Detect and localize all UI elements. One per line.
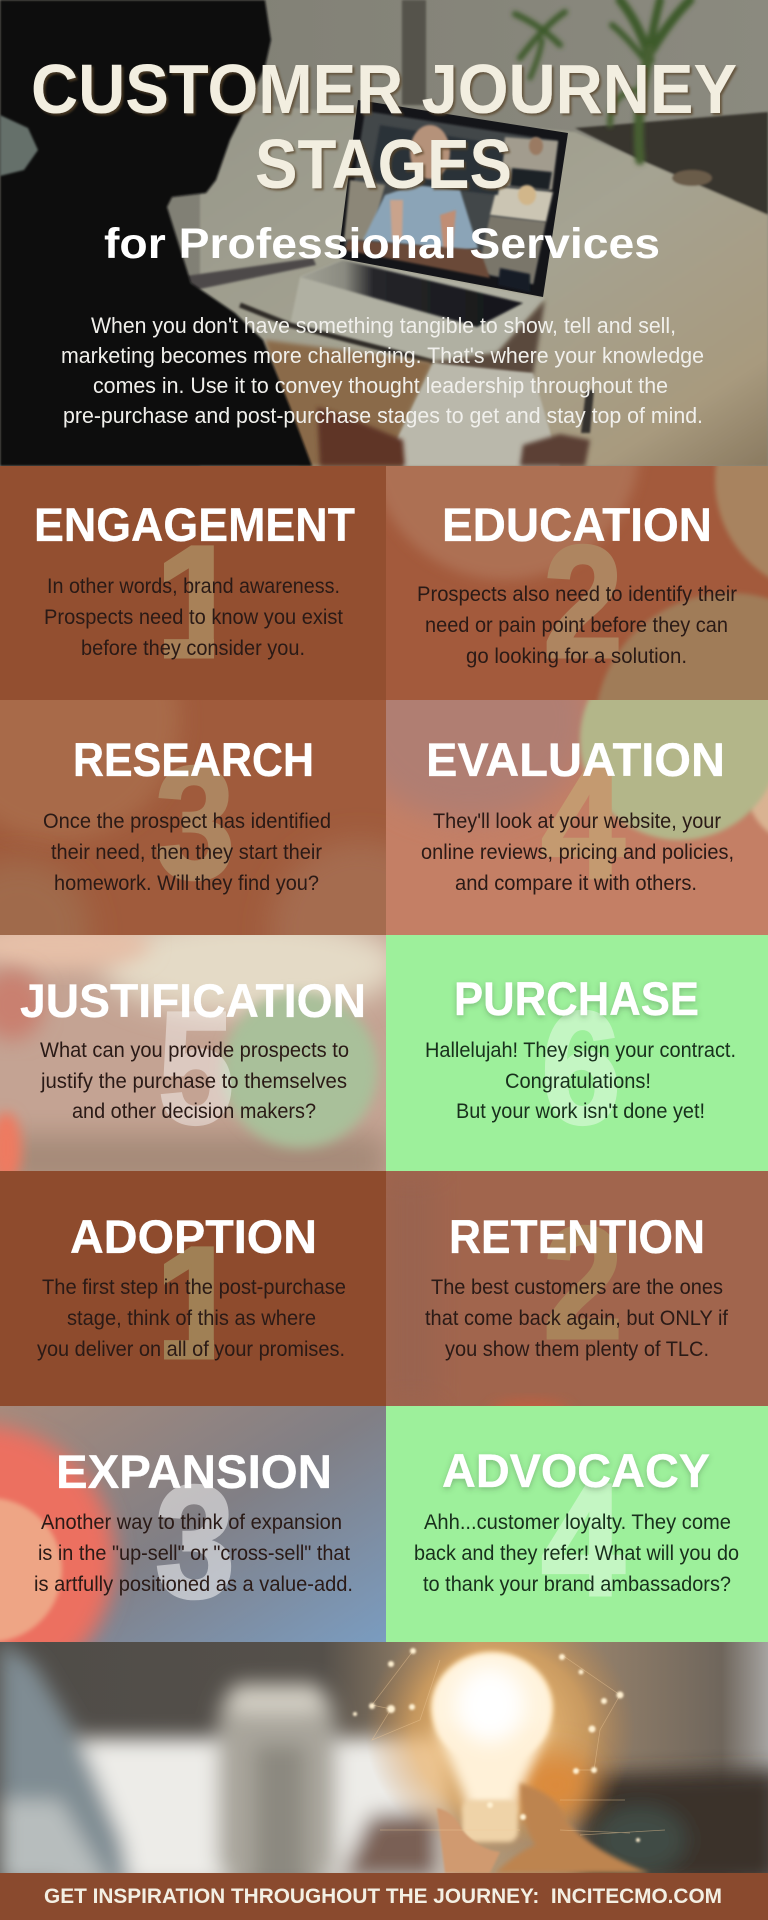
body: advocacy: back and they refer! What will you do	[414, 1542, 739, 1565]
heading: purchase: PURCHASE	[454, 972, 699, 1025]
body: adoption	[37, 1276, 346, 1361]
body: expansion: is artfully positioned as a value-add.	[34, 1573, 353, 1596]
body: research: homework. Will they find you?	[54, 872, 319, 895]
intro paragraph: pre-purchase and post-purchase stages to get and stay top of mind.	[63, 403, 703, 428]
body: engagement	[44, 575, 343, 660]
body: retention	[425, 1276, 728, 1361]
panel: retention	[386, 1171, 768, 1424]
body: adoption: The first step in the post-purchase	[42, 1276, 346, 1299]
body: research	[43, 810, 331, 895]
body: research: their need, then they start their	[51, 841, 322, 864]
heading: expansion: EXPANSION	[56, 1445, 332, 1498]
body: education	[417, 583, 737, 668]
body: retention: The best customers are the ones	[431, 1276, 723, 1299]
number 3: 3	[155, 733, 235, 912]
lightbulb	[352, 1642, 665, 1873]
number 2 post-purchase: 2	[543, 1193, 623, 1372]
panel: engagement	[36, 508, 355, 660]
person silhouette	[0, 0, 312, 466]
panel: research	[0, 700, 386, 935]
number 4 post-purchase: 4	[541, 1450, 625, 1629]
number 6: 6	[541, 978, 621, 1157]
title	[31, 50, 737, 203]
body: adoption: you deliver on all of your promises.	[37, 1338, 345, 1361]
heading: justification: JUSTIFICATION	[20, 974, 366, 1027]
number 3 post-purchase: 3	[155, 1452, 235, 1631]
body: engagement: Prospects need to know you exist	[44, 606, 343, 629]
laptop	[240, 100, 568, 378]
body: purchase: Congratulations!	[505, 1070, 651, 1093]
body: advocacy: Ahh...customer loyalty. They come	[424, 1511, 731, 1534]
body: retention: you show them plenty of TLC.	[445, 1338, 709, 1361]
body: expansion: is in the "up-sell" or "cross-sell" that	[38, 1542, 350, 1565]
body: justification: and other decision makers?	[72, 1100, 316, 1123]
intro paragraph: When you don't have something tangible to show, tell and sell,	[91, 313, 676, 338]
body: expansion	[34, 1511, 353, 1596]
number 2: 2	[543, 512, 623, 691]
notebook and hands	[186, 258, 594, 466]
heading: research: RESEARCH	[73, 733, 314, 786]
body: purchase: Hallelujah! They sign your contract.	[425, 1039, 736, 1062]
heading: advocacy: ADVOCACY	[442, 1444, 710, 1497]
intro paragraph: comes in. Use it to convey thought leadership throughout the	[93, 373, 668, 398]
body: justification: What can you provide prospects to	[40, 1039, 349, 1062]
intro paragraph	[61, 313, 704, 428]
heading: adoption: ADOPTION	[70, 1210, 317, 1263]
number 1 post-purchase: 1	[153, 1213, 242, 1392]
heading: engagement: ENGAGEMENT	[34, 498, 355, 551]
body: advocacy	[414, 1511, 739, 1596]
panel: evaluation	[386, 700, 768, 935]
panel: hero photo background	[0, 0, 768, 466]
footer call to action: GET INSPIRATION THROUGHOUT THE JOURNEY: INCITECMO.COM	[44, 1885, 722, 1908]
body: adoption: stage, think of this as where	[67, 1307, 316, 1330]
body: education: Prospects also need to identify their	[417, 583, 737, 606]
panel: purchase	[386, 935, 768, 1171]
intro paragraph: marketing becomes more challenging. That's where your knowledge	[61, 343, 704, 368]
body: expansion: Another way to think of expansion	[41, 1511, 342, 1534]
panel: lightbulb photo	[0, 1642, 768, 1873]
body: justification	[40, 1039, 349, 1123]
body: evaluation: They'll look at your website, your	[433, 810, 721, 833]
body: engagement: In other words, brand awareness.	[47, 575, 340, 598]
body: evaluation: and compare it with others.	[455, 872, 697, 895]
body: research: Once the prospect has identified	[43, 810, 331, 833]
body: education: go looking for a solution.	[466, 645, 687, 668]
number 5: 5	[158, 978, 234, 1157]
body: engagement: before they consider you.	[81, 637, 305, 660]
panel: adoption	[37, 1220, 346, 1360]
heading: retention: RETENTION	[449, 1210, 705, 1263]
body: education: need or pain point before they can	[425, 614, 728, 637]
panel: education	[386, 466, 768, 700]
title: STAGES	[255, 125, 512, 203]
footer bar	[0, 1873, 768, 1920]
heading: evaluation: EVALUATION	[426, 733, 725, 786]
subtitle: for Professional Services	[104, 220, 660, 268]
number 1: 1	[153, 512, 242, 691]
panel: advocacy	[386, 1406, 768, 1642]
body: purchase	[425, 1039, 736, 1123]
body: evaluation	[421, 810, 734, 895]
panel: expansion	[0, 1406, 386, 1642]
body: advocacy: to thank your brand ambassadors?	[423, 1573, 731, 1596]
number 4: 4	[541, 733, 625, 912]
body: evaluation: online reviews, pricing and policies,	[421, 841, 734, 864]
body: purchase: But your work isn't done yet!	[456, 1100, 705, 1123]
body: retention: that come back again, but ONLY if	[425, 1307, 728, 1330]
heading: education: EDUCATION	[442, 498, 712, 551]
panel: justification	[0, 935, 386, 1171]
title: CUSTOMER JOURNEY	[31, 50, 737, 128]
body: justification: justify the purchase to themselves	[40, 1070, 347, 1093]
